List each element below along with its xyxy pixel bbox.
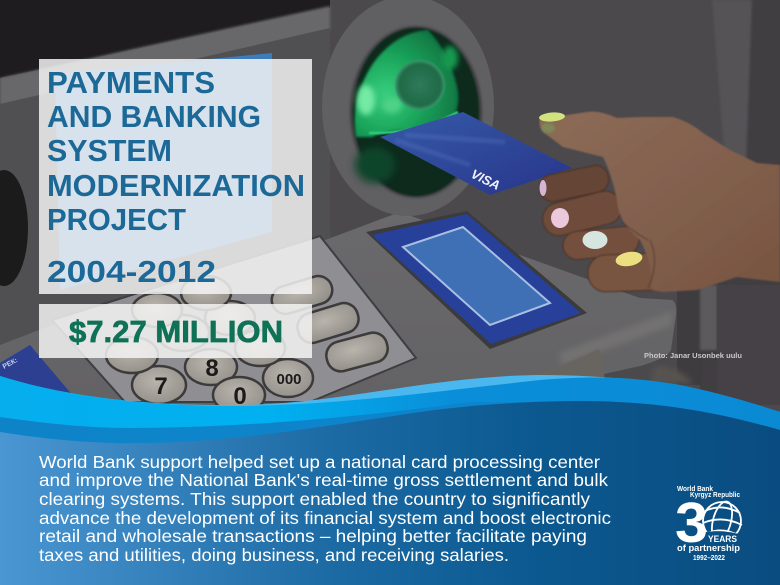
- keypad: 8: [205, 355, 219, 382]
- wave: cyan band: [0, 376, 780, 585]
- body text: and improve the National Bank's real-time gross settlement and bulk: [39, 470, 608, 490]
- body text: taxes and utilities, doing business, and receiving salaries.: [39, 545, 509, 565]
- funding amount panel: $7.27 MILLION: [69, 314, 283, 349]
- fingernails: [539, 112, 644, 268]
- body text: World Bank support helped set up a national card processing center: [39, 452, 600, 472]
- fingers: [537, 163, 671, 292]
- icon: numeral 3: 3: [675, 491, 708, 555]
- logo: World Bank 30 years of partnership: Kyrgyz Republic: [690, 490, 740, 499]
- title: [47, 66, 305, 237]
- bank card: [380, 112, 572, 195]
- logo: World Bank 30 years of partnership: World Bank: [677, 484, 713, 493]
- card slot on left: [0, 170, 28, 286]
- blue sticker: [0, 345, 85, 420]
- title: SYSTEM: [47, 134, 172, 168]
- bank card: VISA: [469, 166, 503, 193]
- title: AND BANKING: [47, 100, 261, 134]
- wave: navy body background: [0, 401, 780, 585]
- keypad: 000: [276, 371, 302, 388]
- wave: light top edge: [0, 375, 780, 450]
- keypad: 0: [233, 383, 247, 410]
- keypad: [52, 236, 416, 413]
- keypad: 7: [154, 373, 168, 400]
- logo: World Bank 30 years of partnership: YEARS: [708, 534, 737, 545]
- title panel: [39, 59, 312, 294]
- funding amount panel: [39, 304, 312, 358]
- body text: advance the development of its financial system and boost electronic: [39, 508, 611, 528]
- card instruction plate: [366, 211, 587, 349]
- title: MODERNIZATION: [47, 169, 305, 203]
- title: PAYMENTS: [47, 66, 215, 100]
- body text: clearing systems. This support enabled the country to significantly: [39, 489, 590, 509]
- photo credit: Photo: Janar Usonbek uulu: [644, 351, 742, 360]
- ATM screen: [55, 53, 272, 290]
- photo: ATM with hand inserting card: РЕК:: [2, 357, 19, 371]
- hand: [537, 112, 780, 292]
- palm and thumb: [539, 112, 780, 292]
- title: PROJECT: [47, 203, 186, 237]
- body text: [39, 452, 611, 565]
- logo: World Bank 30 years of partnership: [675, 484, 742, 562]
- logo: World Bank 30 years of partnership: 1992–2022: [693, 555, 725, 562]
- body text: retail and wholesale transactions – helping better facilitate paying: [39, 526, 587, 546]
- years: 2004-2012: [47, 255, 216, 289]
- card reader bezel: [322, 0, 494, 216]
- icon: globe as zero: [702, 500, 742, 534]
- logo: World Bank 30 years of partnership: of partnership: [677, 543, 740, 554]
- wave: middle blue band: [0, 402, 780, 585]
- lower counter: [0, 212, 676, 420]
- photo: ATM with hand inserting card: [0, 0, 780, 440]
